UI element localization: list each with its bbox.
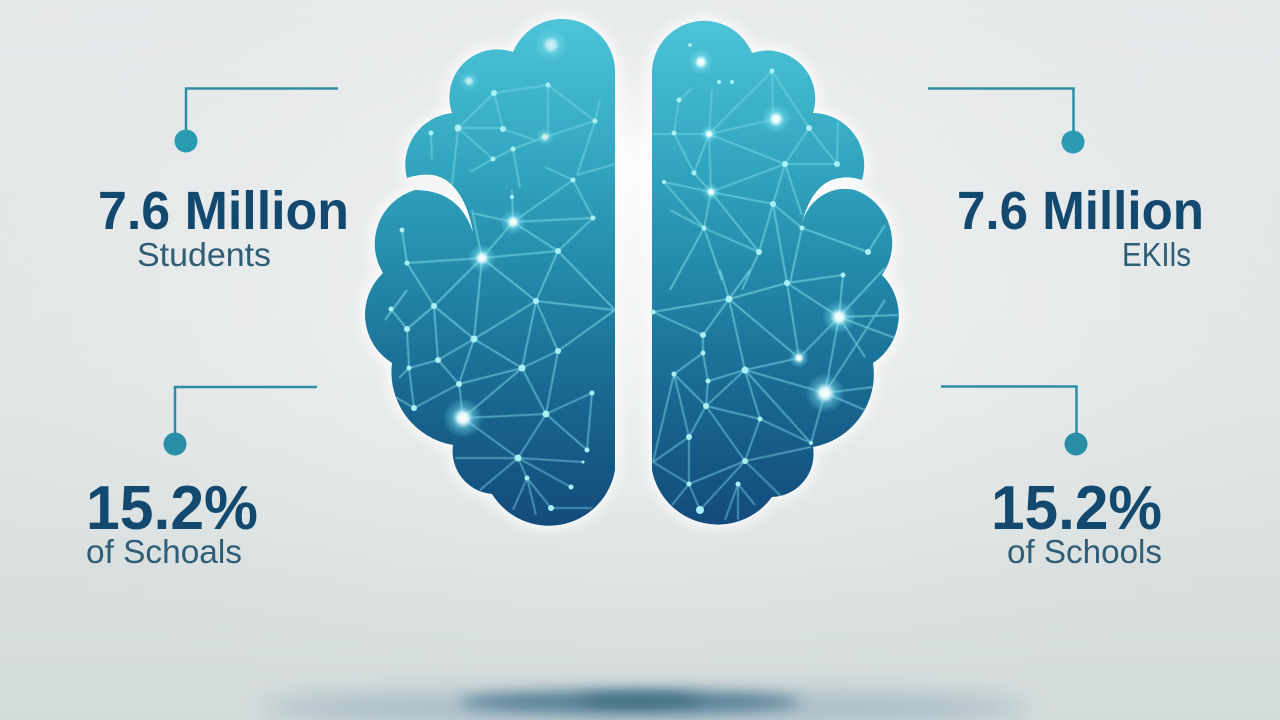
network lines: left hemisphere [385,85,615,515]
stat: 15.2%: 15.2% [86,474,258,543]
network lines: right hemisphere [652,71,898,520]
callout: top left [98,88,349,273]
connector line: top left [186,88,338,130]
center gap glow [615,50,652,520]
dot: top right [1062,130,1084,154]
floor shadow [260,690,1030,720]
callout: bottom right [941,386,1162,570]
callout: bottom left [86,387,317,570]
nodes: left hemisphere [388,28,598,511]
stat: 7.6 Million: 7.6 Million [957,181,1204,241]
label: Students: Students [137,236,271,273]
connector line: bottom right [941,386,1076,433]
brain glow [365,19,899,526]
connector line: bottom left [175,387,317,433]
stat: 15.2%: 15.2% [991,474,1162,543]
connector line: top right [928,88,1074,131]
callout: top right [928,88,1204,273]
nodes: right hemisphere [650,43,871,514]
right brain hemisphere [650,21,899,525]
label: of Schools: of Schools [1007,533,1162,570]
dot: bottom right [1064,432,1088,456]
label: EKIls: EKIls [1122,236,1191,273]
left brain hemisphere [365,19,615,526]
dot: top left [174,130,198,152]
stat: 7.6 Million: 7.6 Million [98,181,349,241]
label: of Schoals: of Schoals [86,533,242,570]
dot: bottom left [164,432,186,456]
